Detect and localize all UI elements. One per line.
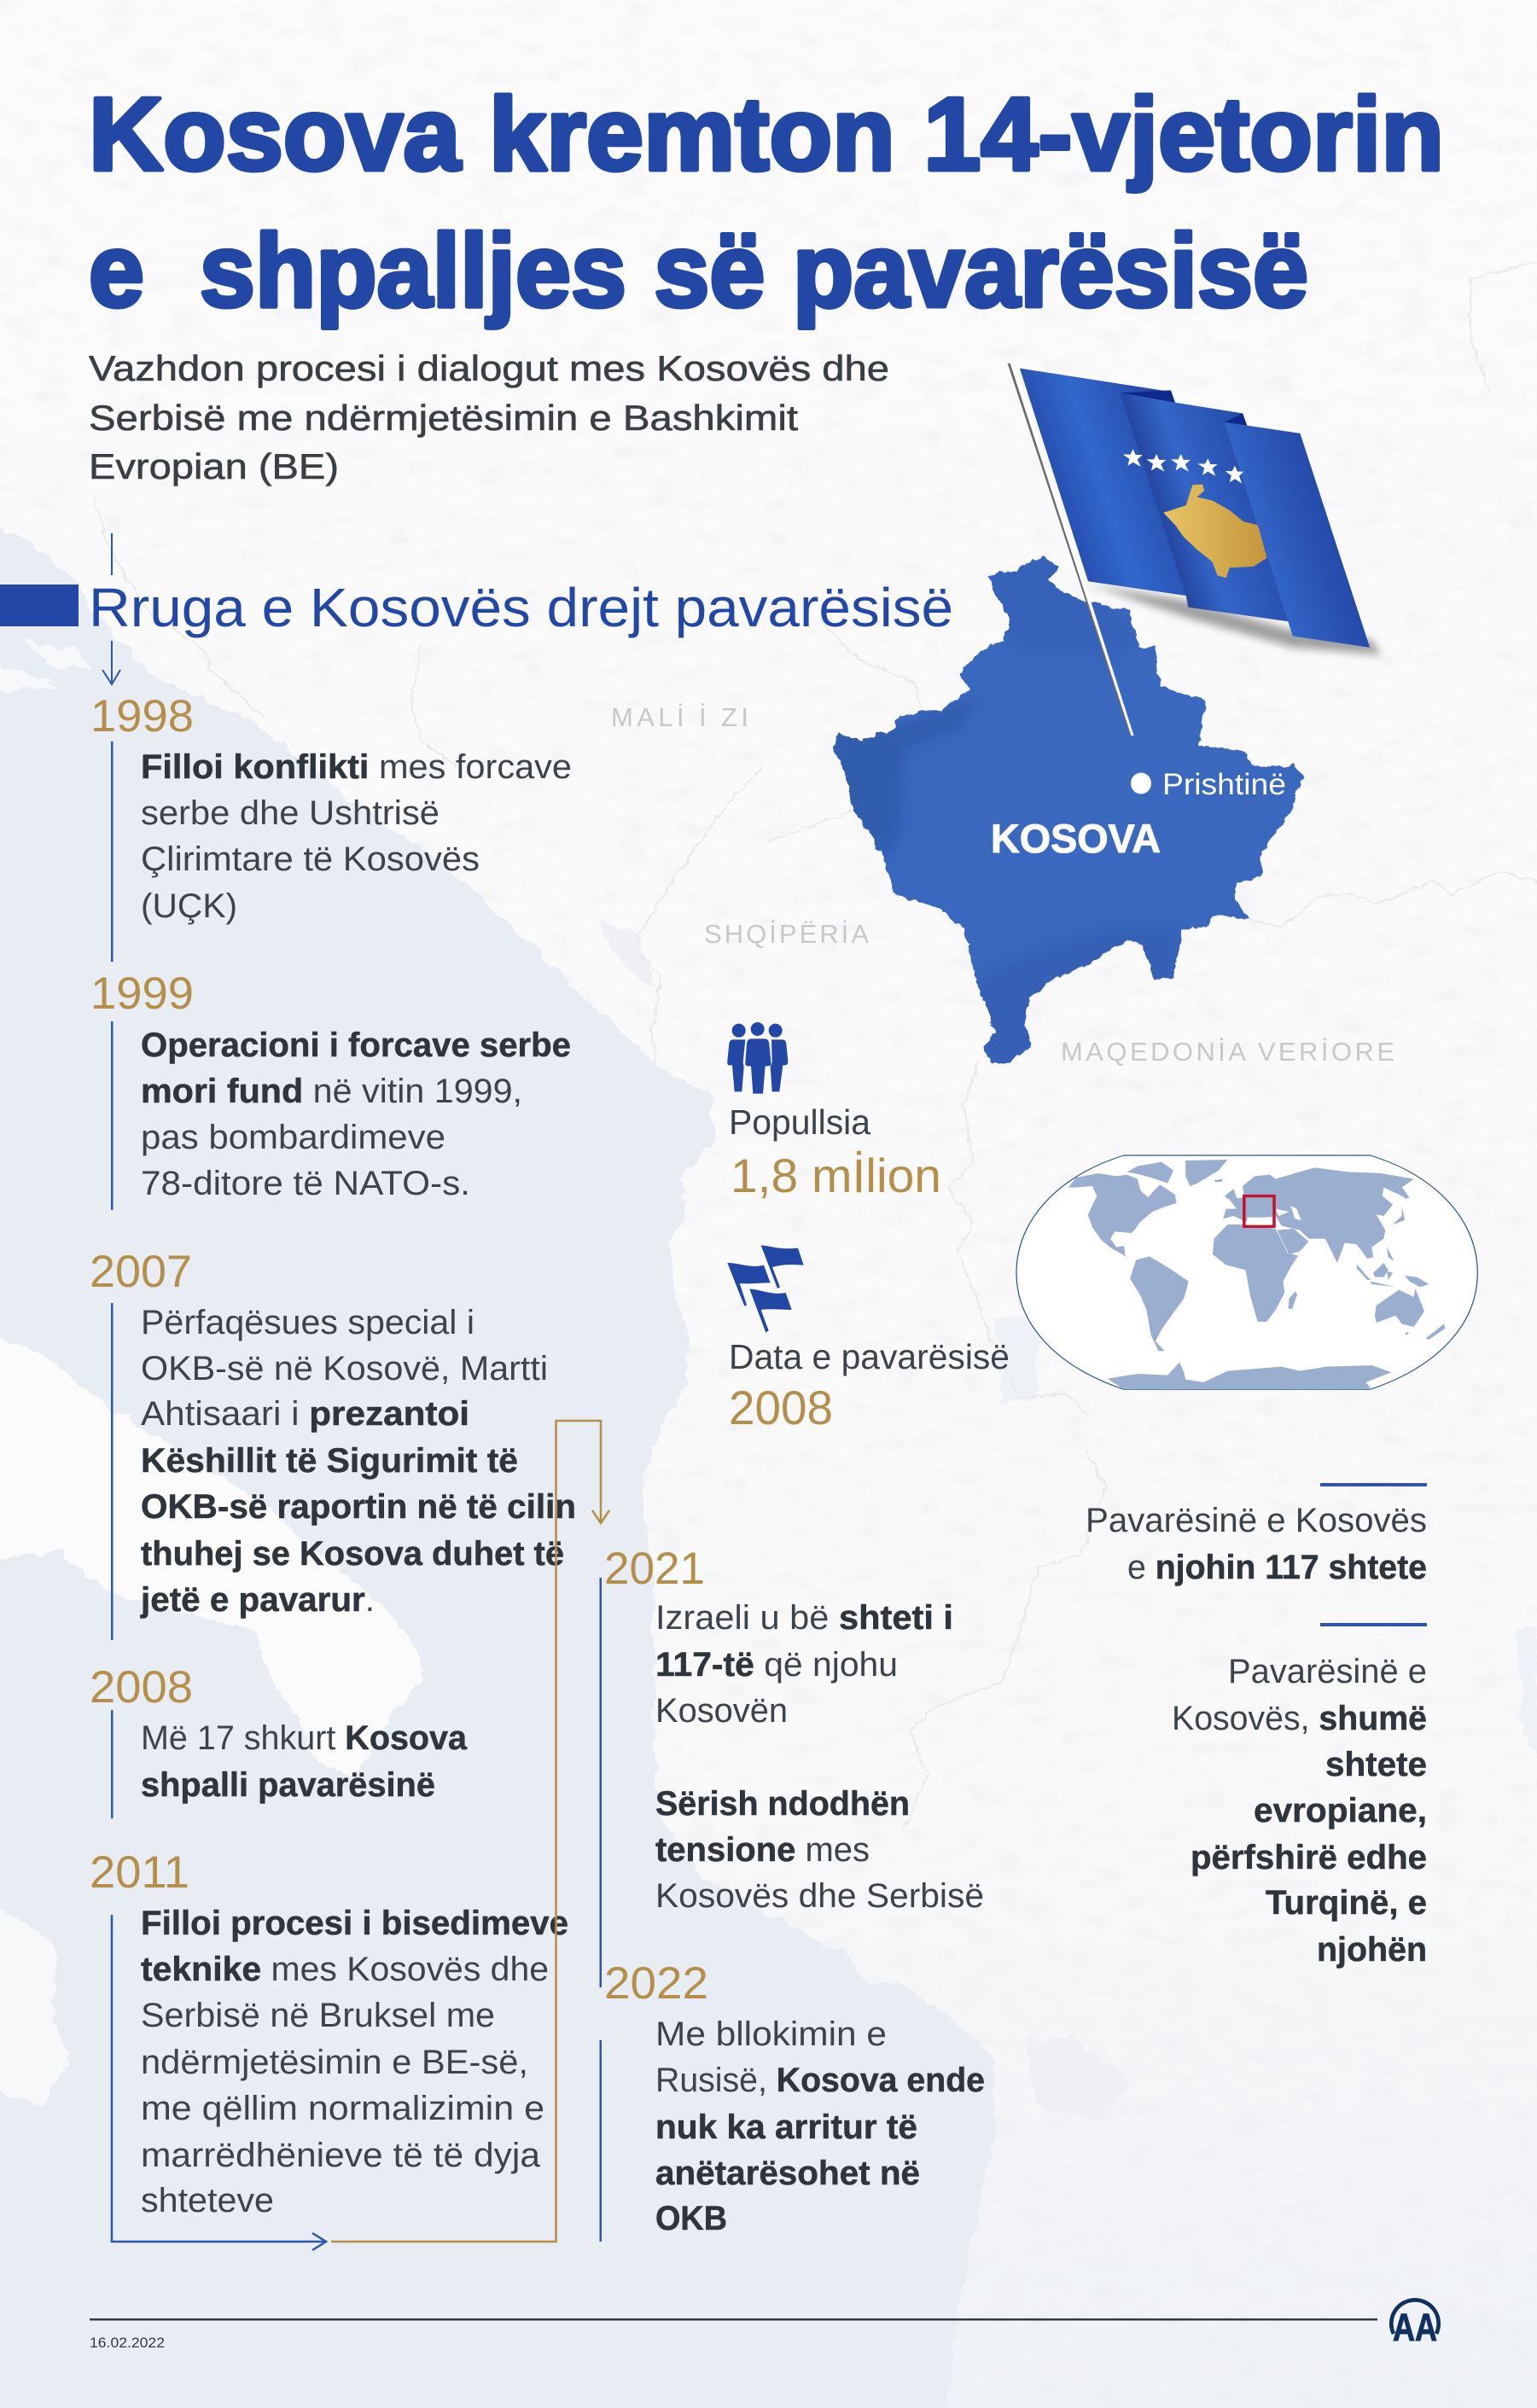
timeline: 2011: teknike mes Kosovës dhe — [141, 1951, 549, 1988]
arrow: blue connector — [112, 1915, 326, 2250]
timeline: 1999: mori fund në vitin 1999, — [141, 1073, 522, 1110]
timeline: 2011: marrëdhënieve të të dyja — [141, 2137, 541, 2174]
timeline: 2011: ndërmjetësimin e BE-së, — [141, 2044, 528, 2081]
arrow: gold connector — [331, 1421, 609, 2242]
map label: Shqipëria: SHQİPËRİA — [704, 919, 869, 949]
timeline: 1998 — [90, 691, 572, 962]
fact: many European states: evropiane, — [1254, 1792, 1427, 1829]
timeline: 2007: 2007 — [90, 1247, 192, 1297]
timeline: 2011 — [90, 1847, 568, 2219]
timeline: 2011: shteteve — [141, 2182, 274, 2219]
timeline: 2021 — [599, 1544, 984, 1987]
fact: many European states: Pavarësinë e — [1228, 1653, 1427, 1690]
icon: Kosovo flag on a pole — [1008, 364, 1382, 736]
timeline: 2022: Me bllokimin e — [655, 2015, 887, 2053]
timeline: 2007: OKB-së në Kosovë, Martti — [141, 1350, 548, 1387]
timeline: 2022: Rusisë, Kosova ende — [655, 2062, 985, 2099]
timeline: 2007: OKB-së raportin në të cilin — [141, 1488, 576, 1526]
section heading bar — [0, 585, 79, 626]
icon: people — [727, 1022, 788, 1094]
map label: Prishtinë: Prishtinë — [1162, 768, 1286, 801]
stat: independence date: Data e pavarësisë — [729, 1337, 1010, 1376]
stat: population: 1,8 mİlion — [731, 1149, 941, 1202]
map label: Mali i Zi: MALİ İ ZI — [611, 702, 748, 732]
fact: many European states: njohën — [1317, 1931, 1427, 1969]
timeline: 2022: anëtarësohet në — [655, 2155, 920, 2192]
timeline: 2008: shpalli pavarësinë — [141, 1766, 435, 1804]
timeline: 2011: 2011 — [90, 1847, 189, 1898]
arrow: into timeline — [102, 533, 120, 684]
footer rule — [90, 2318, 1377, 2321]
timeline: 2011: me qëllim normalizimin e — [141, 2090, 544, 2127]
timeline: 1999: 1999 — [90, 968, 194, 1019]
fact: many European states: Kosovës, shumë — [1172, 1700, 1427, 1737]
stat: population: Popullsia — [729, 1102, 870, 1142]
subtitle: Serbisë me ndërmjetësimin e Bashkimit — [89, 398, 798, 438]
timeline: 2007 — [90, 1247, 576, 1640]
fact: many European states: shtete — [1325, 1746, 1427, 1783]
timeline: 2007: Përfaqësues special i — [141, 1304, 474, 1341]
timeline: 1999: pas bombardimeve — [141, 1119, 445, 1156]
timeline: 2021: 117-të që njohu — [655, 1646, 898, 1684]
fact: many European states: Turqinë, e — [1266, 1884, 1427, 1922]
timeline: 1998: Çlirimtare të Kosovës — [141, 840, 480, 878]
timeline: 1998: serbe dhe Ushtrisë — [141, 794, 440, 832]
fact: many European states — [1172, 1623, 1427, 1969]
date: 16.02.2022 — [90, 2335, 165, 2351]
timeline: 2007: thuhej se Kosova duhet të — [141, 1535, 564, 1573]
map label: Kosova: KOSOVA — [991, 816, 1161, 861]
timeline: 2008: 2008 — [90, 1662, 193, 1713]
timeline: 1998: 1998 — [90, 691, 194, 742]
timeline: 2007: Këshillit të Sigurimit të — [141, 1442, 518, 1480]
timeline: 2022 — [599, 1958, 985, 2242]
subtitle: Evropian (BE) — [89, 446, 339, 486]
stat: independence date: 2008 — [729, 1381, 833, 1434]
stat: independence date — [729, 1337, 1010, 1434]
subtitle — [89, 348, 889, 486]
timeline: 2022: 2022 — [604, 1958, 708, 2009]
timeline: 1998: Filloi konflikti mes forcave — [141, 748, 572, 786]
world locator map — [1016, 1155, 1477, 1389]
timeline: 2011: Serbisë në Bruksel me — [141, 1997, 495, 2034]
timeline: 2021: Izraeli u bë shteti i — [655, 1599, 953, 1637]
subtitle: Vazhdon procesi i dialogut mes Kosovës dhe — [89, 348, 889, 388]
timeline: 2008: Më 17 shkurt Kosova — [141, 1719, 468, 1757]
timeline: 1999 — [90, 968, 571, 1210]
timeline: 1999: 78-ditore të NATO-s. — [141, 1165, 470, 1202]
timeline: 1999: Operacioni i forcave serbe — [141, 1027, 571, 1064]
title: Kosova kremton 14-vjetorin — [89, 76, 1444, 192]
timeline: 2021: Kosovën — [655, 1692, 788, 1730]
section heading: Rruga e Kosovës drejt pavarësisë — [89, 577, 953, 638]
title: e shpalljes së pavarësisë — [89, 212, 1308, 329]
timeline: 2011: Filloi procesi i bisedimeve — [141, 1905, 568, 1942]
timeline: 2021: 2021 — [604, 1544, 705, 1594]
fact: recognised by 117 states: Pavarësinë e Kosovës — [1086, 1502, 1427, 1539]
fact: recognised by 117 states — [1086, 1483, 1427, 1586]
timeline: 2021: tensione mes — [655, 1831, 870, 1869]
timeline: 1998: (UÇK) — [141, 887, 237, 925]
timeline: 2007: jetë e pavarur. — [140, 1581, 375, 1619]
map label: Maqedonia Veriore: MAQEDONİA VERİORE — [1061, 1037, 1394, 1067]
timeline: 2022: OKB — [655, 2200, 727, 2237]
timeline: 2021: Kosovës dhe Serbisë — [655, 1877, 984, 1915]
timeline: 2021: Sërish ndodhën — [655, 1785, 910, 1823]
timeline: 2022: nuk ka arritur të — [655, 2108, 917, 2146]
timeline: 2007: Ahtisaari i prezantoi — [141, 1395, 469, 1433]
logo: AA: AA — [1393, 2306, 1437, 2349]
fact: many European states: përfshirë edhe — [1191, 1839, 1427, 1876]
title — [89, 76, 1444, 329]
timeline: 2008 — [90, 1662, 468, 1818]
icon: Kosovo map — [829, 555, 1304, 1067]
stat: population — [729, 1102, 941, 1202]
fact: recognised by 117 states: e njohin 117 shtete — [1127, 1549, 1427, 1586]
icon: flags — [727, 1245, 804, 1333]
